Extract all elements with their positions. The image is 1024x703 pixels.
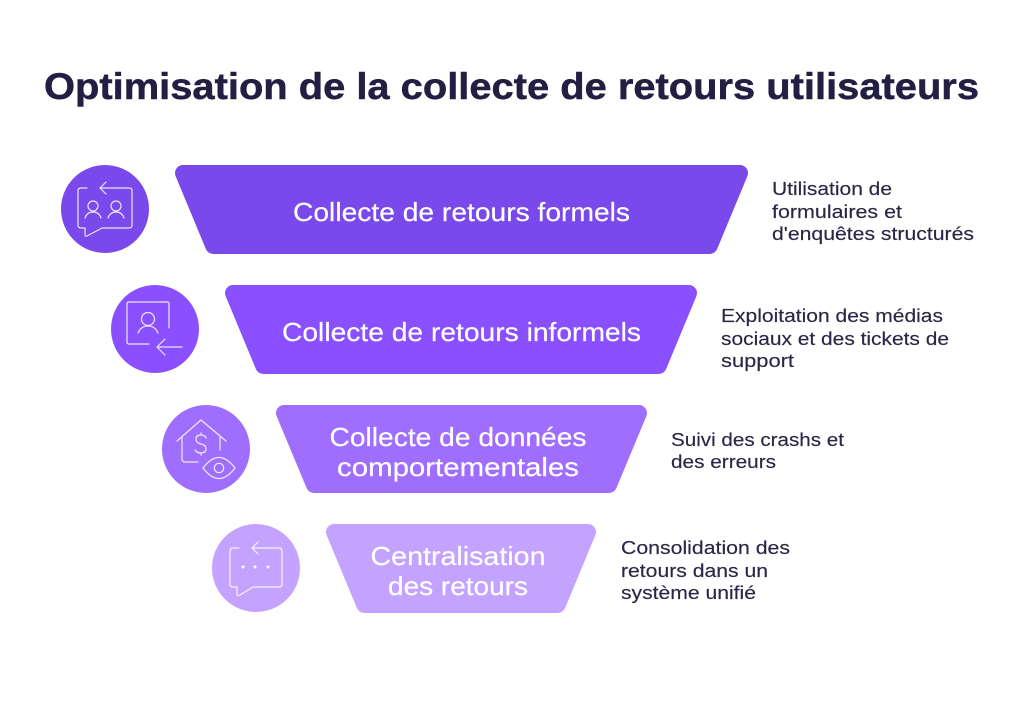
banner: collecte de données comportementales: comportementales (337, 452, 579, 482)
description: behavioral: Suivi des crashs et (671, 430, 844, 450)
panel: centralisation (212, 524, 790, 612)
description: centralisation: Consolidation des (621, 538, 790, 558)
icon: house and eye circle (162, 405, 250, 493)
description: behavioral: des erreurs (671, 452, 776, 472)
description: centralisation: retours dans un (621, 561, 768, 581)
icon: formal feedback circle (61, 165, 149, 253)
title: Optimisation de la collecte de retours utilisateurs (44, 66, 979, 107)
banner: collecte de retours informels (233, 293, 689, 366)
banner: collecte de retours formels: Collecte de retours formels (293, 197, 630, 227)
panel: collecte informelle (111, 285, 949, 373)
description: formal: formulaires et (772, 202, 902, 222)
banner: collecte de retours informels: Collecte de retours informels (282, 317, 641, 347)
icon: informal feedback circle (111, 285, 199, 373)
description: formal: Utilisation de (772, 179, 892, 199)
banner: centralisation des retours: Centralisation (370, 541, 546, 571)
description: formal: d'enquêtes structurés (772, 224, 974, 244)
banner: collecte de données comportementales (284, 413, 639, 485)
banner: centralisation des retours: des retours (388, 571, 528, 601)
panel: données comportementales (162, 405, 844, 493)
banner: collecte de retours formels (183, 173, 740, 246)
description: informal: sociaux et des tickets de (721, 329, 949, 349)
description: informal: Exploitation des médias (721, 306, 943, 326)
banner: collecte de données comportementales: Collecte de données (330, 422, 586, 452)
icon: centralised chat circle (212, 524, 300, 612)
description: centralisation: système unifié (621, 583, 756, 603)
panel: collecte formelle (61, 165, 974, 253)
description: informal: support (721, 351, 794, 371)
banner: centralisation des retours (334, 532, 588, 605)
